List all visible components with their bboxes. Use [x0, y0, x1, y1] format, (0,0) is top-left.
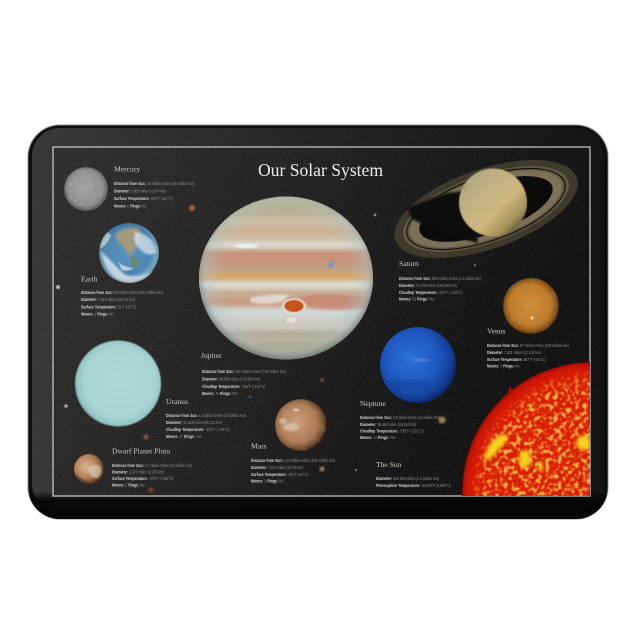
Neptune facts [360, 414, 441, 440]
icon: Mercury planet [64, 167, 108, 211]
Mercury facts: Diameter: 3,030 miles (4,878 km) [114, 188, 167, 194]
panel: Mercury [64, 164, 195, 211]
Uranus facts: Cloudtop Temperature: -320°F (-195°C) [166, 426, 230, 432]
Venus facts: Surface Temperature: 867°F (464°C) [487, 356, 546, 362]
Earth facts: Distance from Sun: 93 million miles (150 million km) [81, 289, 163, 295]
Neptune name: Neptune [360, 399, 386, 408]
Uranus name: Uranus [166, 397, 188, 406]
panel: Mars [251, 399, 335, 484]
Mars facts: Surface Temperature: -85°F (-65°C) [251, 471, 309, 477]
Sun facts [376, 475, 452, 488]
Sun facts: Photosphere Temperature: 10,000°F (5,500°C) [376, 482, 452, 488]
Pluto facts: Moons: 5 Rings: No [112, 482, 145, 488]
panel: Dwarf Planet Pluto [74, 446, 193, 488]
icon: Uranus planet [75, 340, 161, 426]
Earth name: Earth [81, 274, 98, 284]
icon: Mars planet [275, 399, 327, 451]
panel: The Sun [376, 362, 590, 496]
Mars facts: Diameter: 4,212 miles (6,779 km) [251, 464, 304, 470]
Mercury facts: Distance from Sun: 36 million miles (58 million km) [114, 180, 195, 186]
Jupiter facts: Cloudtop Temperature: -166°F (-110°C) [202, 383, 266, 389]
Jupiter name: Jupiter [201, 351, 222, 360]
Pluto facts: Distance from Sun: 3.7 billion miles (5.9 billion km) [112, 462, 193, 468]
Pluto facts: Diameter: 1,473 miles (2,370 km) [112, 469, 165, 475]
Saturn facts: Cloudtop Temperature: -220°F (-140°C) [399, 289, 463, 295]
Pluto name: Dwarf Planet Pluto [112, 446, 170, 456]
panel: Earth [81, 223, 163, 317]
icon: Neptune planet [380, 327, 456, 403]
panel: Saturn [382, 140, 590, 302]
Jupiter facts: Diameter: 88,846 miles (142,984 km) [202, 376, 261, 382]
Saturn facts: Distance from Sun: 886 million miles (1.4 billion km) [399, 275, 481, 281]
Pluto facts [112, 462, 193, 488]
frame border [53, 147, 590, 496]
panel: Jupiter [199, 196, 373, 396]
Great Red Spot [282, 298, 306, 314]
Venus name: Venus [487, 326, 506, 336]
starfield background panel [53, 147, 590, 496]
Venus facts: Moons: 0 Rings: No [487, 363, 520, 369]
panel: Neptune [360, 327, 456, 440]
Jupiter facts: Distance from Sun: 484 million miles (778 million km) [202, 368, 286, 374]
Mercury facts [114, 180, 195, 209]
Mars facts [251, 457, 335, 484]
icon: Jupiter planet [199, 196, 373, 360]
Earth facts: Surface Temperature: 59°F (15°C) [81, 304, 137, 310]
Earth facts: Diameter: 7,918 miles (12,742 km) [81, 296, 136, 302]
Mercury facts: Moons: 0 Rings: No [114, 203, 147, 209]
Jupiter facts [202, 368, 286, 396]
Neptune facts: Diameter: 30,598 miles (49,244 km) [360, 421, 417, 427]
Uranus facts [166, 412, 247, 439]
Mercury facts: Surface Temperature: 333°F (167°C) [114, 195, 173, 201]
Venus facts: Diameter: 7,521 miles (12,104 km) [487, 349, 542, 355]
Earth facts [81, 289, 163, 317]
title: Our Solar System [258, 160, 383, 180]
Mars name: Mars [251, 442, 267, 450]
Mercury name: Mercury [114, 164, 140, 174]
Saturn facts [399, 275, 481, 302]
bath mat body [28, 125, 608, 519]
icon: Pluto [74, 454, 104, 486]
Uranus facts: Diameter: 31,518 miles (50,724 km) [166, 419, 223, 425]
Mars facts: Moons: 2 Rings: No [251, 478, 284, 484]
Uranus facts: Moons: 27 Rings: Yes [166, 433, 202, 439]
Saturn facts: Moons: 62 Rings: Yes [399, 296, 435, 302]
Saturn name: Saturn [399, 259, 419, 268]
panel: Uranus [75, 340, 247, 439]
Sun name: The Sun [376, 460, 402, 469]
Venus facts: Distance from Sun: 67 million miles (108 million km) [487, 342, 569, 348]
Neptune facts: Distance from Sun: 2.8 billion miles (4.5 billion km) [360, 414, 441, 420]
Earth facts: Moons: 1 Rings: No [81, 311, 114, 317]
icon: Sun [462, 362, 590, 496]
Saturn facts: Diameter: 72,400 miles (116,500 km) [399, 282, 457, 288]
Jupiter facts: Moons: 79 Rings: Yes [202, 390, 238, 396]
Sun facts: Diameter: 864,938 miles (1.4 million km) [376, 475, 440, 481]
panel: Venus [487, 278, 569, 369]
icon: Earth planet [99, 223, 159, 284]
Uranus facts: Distance from Sun: 1.8 billion miles (2.9 billion km) [166, 412, 247, 418]
Neptune facts: Moons: 14 Rings: Yes [360, 434, 396, 440]
Pluto facts: Surface Temperature: -375°F (-225°C) [112, 475, 174, 481]
Neptune facts: Cloudtop Temperature: -330°F (-201°C) [360, 428, 424, 434]
icon: Venus planet [503, 278, 559, 334]
Venus facts [487, 342, 569, 369]
icon: Saturn with rings [382, 140, 590, 278]
Mars facts: Distance from Sun: 142 million miles (228 million km) [251, 457, 335, 463]
